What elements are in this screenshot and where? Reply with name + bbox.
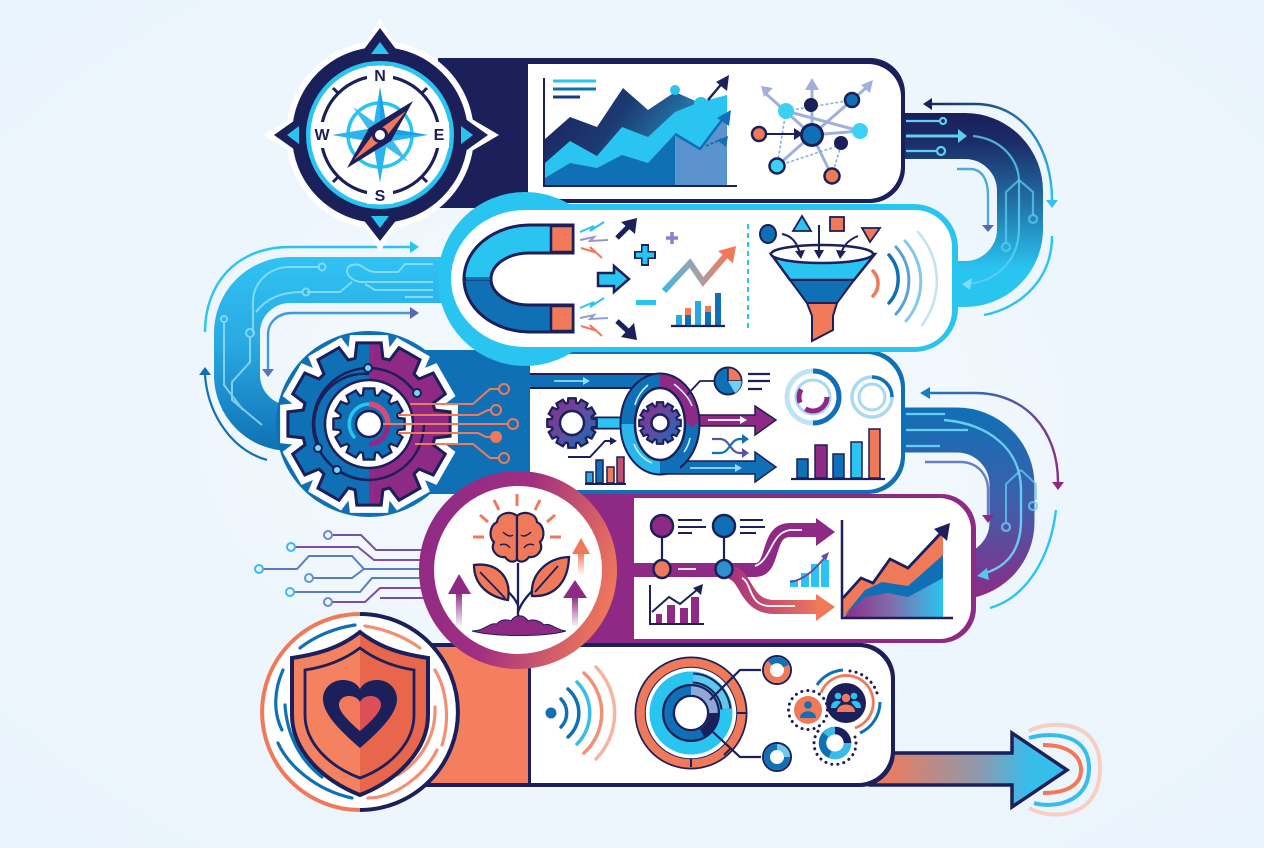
connector: panel 2 to panel 3 [199,241,445,460]
panel 2: attraction [438,192,958,366]
compass letters: S [375,188,386,205]
mini bars [671,293,725,326]
bar chart [791,429,885,479]
icon: shuffle [712,434,749,458]
pie chart with legend [687,368,770,395]
ring chart [640,656,791,771]
brain [491,513,543,562]
mini bar chart [568,437,626,484]
zigzag trend arrow [664,246,736,291]
icon: plant with brain [419,471,617,669]
shield swooshes [276,625,446,798]
panel 4: growth [575,494,976,643]
soil [472,616,566,636]
light rays [473,494,561,537]
area chart: growth [842,520,953,618]
stem and leaves [474,557,569,622]
icon: large gear with circuits [276,331,518,517]
compass letters [312,66,449,205]
icon: magnet [464,225,573,332]
panel 1: direction [438,58,905,208]
people cluster [788,670,880,764]
signal waves [546,667,615,759]
signal waves [873,232,937,325]
panel 5: protection [400,643,895,787]
compass letters: N [374,68,386,85]
network graph [752,78,873,184]
end arrow [870,725,1100,815]
icon: small gears [547,398,681,448]
compass letters: E [434,127,445,144]
icon: funnel [760,216,880,341]
mini growth chart [650,584,704,624]
compass letters: W [314,127,330,144]
area chart: growth [544,75,737,186]
icon: compass [263,18,499,252]
compass rose [332,87,428,183]
cyan mini bars with arrow [790,552,829,587]
lightning sparks [580,222,608,336]
growth arrows [448,538,590,628]
connector: panel 1 to panel 2 [895,98,1058,315]
milestone flow [634,515,835,621]
target rings [1029,725,1100,815]
circuit traces [383,384,518,463]
heart [323,680,397,748]
circuit lines to plant [255,531,425,606]
icon: shield with heart [262,614,458,810]
donut charts [787,371,892,423]
process pipeline [530,377,776,482]
panel 3: process [420,350,905,494]
connector: panel 3 to panel 4 [895,387,1064,608]
force arrows and signs [598,218,678,340]
